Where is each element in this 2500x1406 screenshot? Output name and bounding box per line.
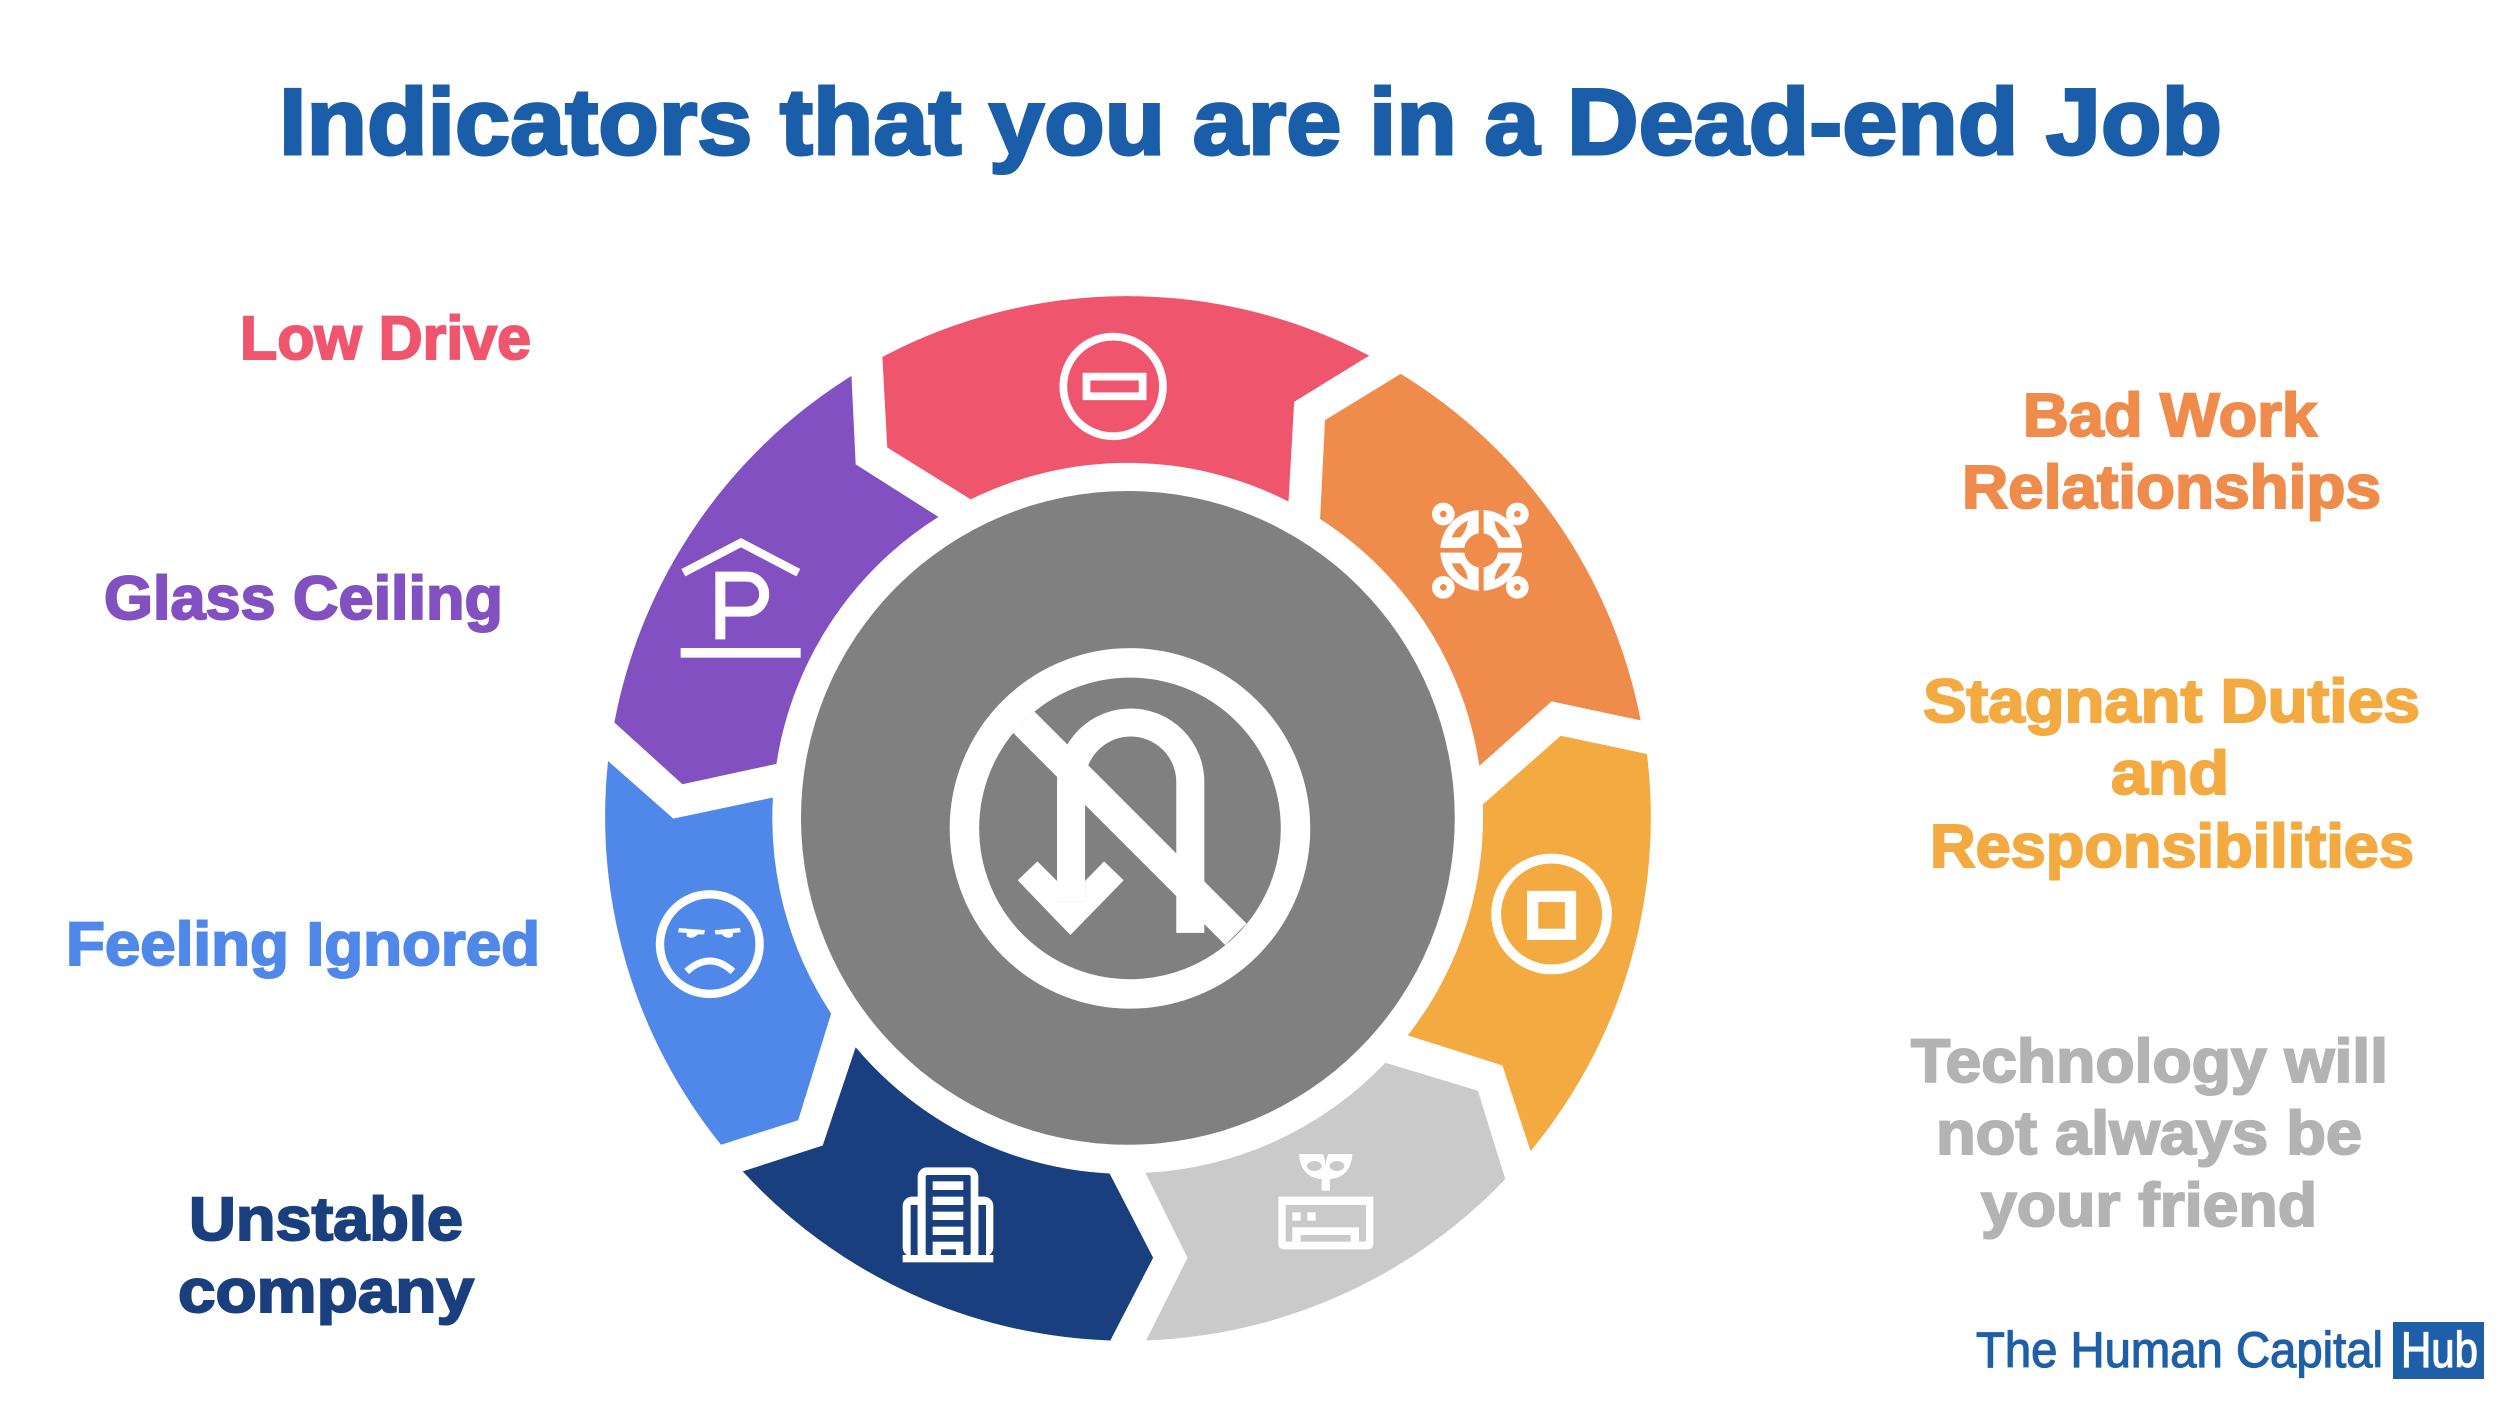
label: Technology will not always be your friend: Technology will: [1911, 1027, 2388, 1095]
label: Stagnant Duties and Responsibilities: [1923, 667, 2420, 880]
icon: minus circle: [1063, 337, 1163, 436]
label: Bad Work Relationships: Bad Work: [2023, 381, 2317, 449]
label: Bad Work Relationships: [1962, 381, 2381, 521]
title: Indicators that you are in a Dead-end Job: [279, 69, 2222, 174]
segment: Technology: [1145, 1063, 1505, 1340]
segment: Bad Work Relationships: [1320, 374, 1641, 766]
label: Unstable company: Unstable: [189, 1185, 463, 1253]
label: Low Drive: Low Drive: [240, 304, 531, 372]
icon: office building: [903, 1167, 993, 1262]
icon: team circle: [1436, 507, 1525, 595]
label: Unstable company: [178, 1185, 474, 1325]
circular diagram: [605, 296, 1651, 1340]
segment: Low Drive: [882, 296, 1369, 501]
segment: Unstable company: [743, 1047, 1153, 1340]
label: Technology will not always be your friend: your friend: [1981, 1171, 2317, 1239]
icon: square circle: [1496, 859, 1607, 969]
segment: Glass Ceiling: [614, 376, 938, 784]
label: Unstable company: company: [178, 1257, 474, 1325]
label: Stagnant Duties and Responsibilities: Stagnant Duties: [1923, 667, 2420, 735]
logo: The Human Capital Hub: The Human Capital: [1976, 1322, 2383, 1378]
icon: sad face: [660, 894, 760, 994]
label: Technology will not always be your friend: not always be: [1936, 1099, 2362, 1167]
centre circle: [801, 491, 1455, 1145]
icon: keyboard with plant: [1278, 1154, 1373, 1249]
ring segments and centre: [605, 296, 1651, 1340]
label: Stagnant Duties and Responsibilities: and: [2111, 739, 2229, 807]
segment: Feeling Ignored: [605, 761, 831, 1145]
label: Technology will not always be your friend: [1911, 1027, 2388, 1239]
logo: The Human Capital Hub: Hub: [2401, 1322, 2478, 1378]
segment: Stagnant Duties: [1408, 736, 1651, 1151]
icon: parking roof: [681, 543, 801, 658]
icon: no U-turn: [964, 663, 1296, 994]
label: Bad Work Relationships: Relationships: [1962, 453, 2381, 521]
label: Stagnant Duties and Responsibilities: Responsibilities: [1930, 812, 2414, 880]
label: Glass Ceiling: Glass Ceiling: [104, 564, 503, 632]
label: Feeling Ignored: Feeling Ignored: [66, 910, 540, 978]
